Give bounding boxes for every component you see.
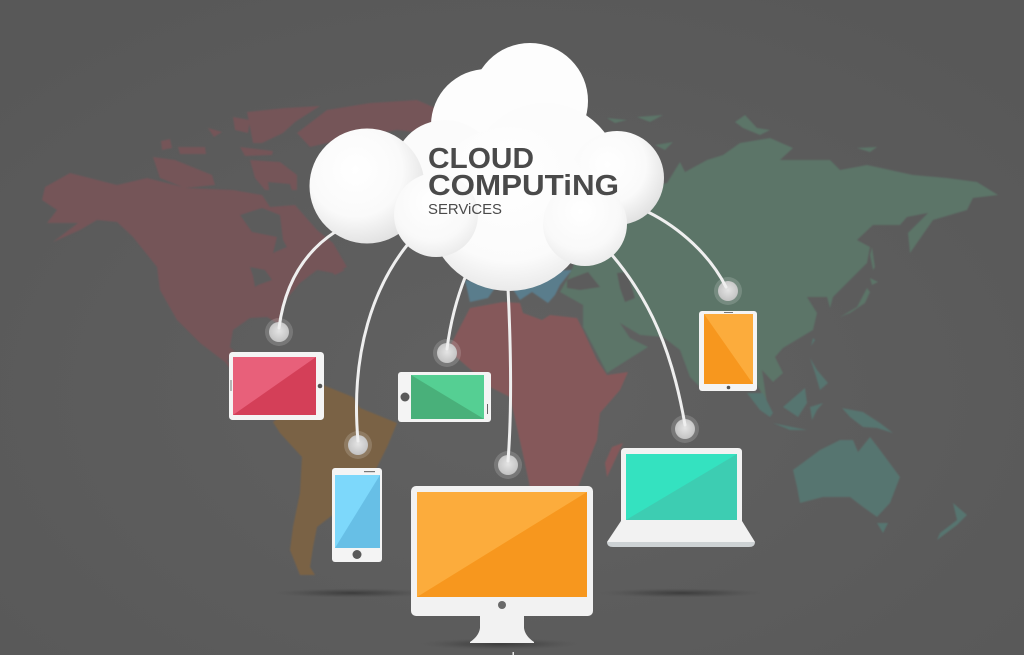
node: monitor xyxy=(494,451,522,479)
floor shadows xyxy=(270,588,766,650)
title: cloud computing services xyxy=(428,143,619,218)
node: blue phone xyxy=(344,431,372,459)
node: laptop xyxy=(671,415,699,443)
device: orange tablet xyxy=(699,311,757,391)
map: Southeast Asia and Oceania xyxy=(747,338,967,540)
wire to monitor xyxy=(508,288,511,461)
subtitle: SERViCES: SERViCES xyxy=(428,201,502,218)
wire to blue phone xyxy=(356,244,408,441)
map: Africa xyxy=(448,302,628,487)
connector wires xyxy=(279,212,726,461)
device: laptop xyxy=(607,448,755,547)
world map xyxy=(42,100,998,575)
wire to green phone xyxy=(447,275,466,349)
device: red tablet xyxy=(229,352,324,420)
title line: CLOUD: CLOUD xyxy=(428,143,534,175)
map: North America and Greenland xyxy=(42,100,440,422)
map: South America xyxy=(273,385,397,575)
device: green phone xyxy=(398,372,491,422)
node: red tablet xyxy=(265,318,293,346)
title line: COMPUTiNG: COMPUTiNG xyxy=(428,170,619,202)
icon: cloud xyxy=(310,43,664,291)
map: Europe xyxy=(465,270,572,303)
device: desktop monitor xyxy=(411,486,593,655)
device: blue phone xyxy=(332,468,382,562)
wire to laptop xyxy=(612,255,685,425)
node: green phone xyxy=(433,339,461,367)
connector nodes xyxy=(265,277,742,479)
node: orange tablet xyxy=(714,277,742,305)
wire to orange tablet xyxy=(648,212,726,287)
map: Asia xyxy=(560,115,998,403)
wire to red tablet xyxy=(279,232,335,328)
